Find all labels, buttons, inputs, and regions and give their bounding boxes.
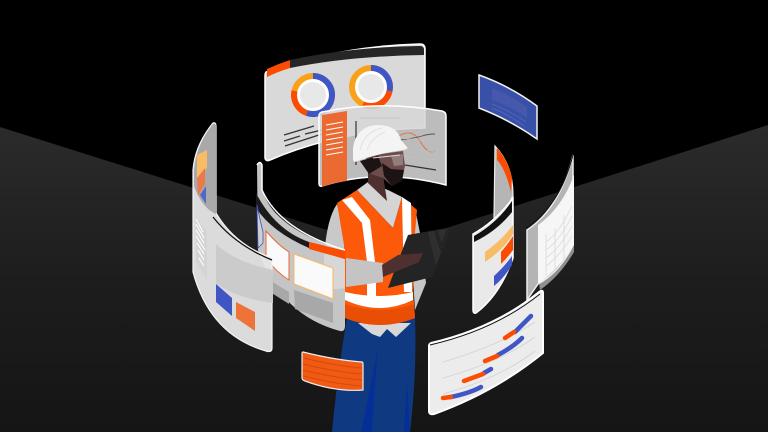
donut right: [352, 68, 390, 106]
donut left: [294, 76, 332, 114]
text lines: [284, 126, 322, 146]
blue sliver: [257, 205, 263, 248]
dark band: [256, 193, 345, 259]
panel: centre wireframe cards: [256, 162, 345, 331]
neck: [368, 171, 387, 201]
chart grid lines: [360, 118, 436, 160]
grey tile: [216, 244, 273, 303]
sidebar: [322, 111, 347, 187]
sidebar lines: [326, 122, 343, 155]
orange tile: [236, 302, 255, 331]
grey tile two: [294, 290, 333, 323]
back fold: [194, 124, 216, 214]
card lines: [492, 104, 526, 126]
table underside shadow: [538, 240, 574, 290]
white tile one: [266, 231, 289, 280]
shirt collar: [357, 182, 402, 228]
bars blue: [451, 316, 531, 397]
black band: [474, 201, 512, 242]
background floor: [0, 125, 768, 432]
orange header: [309, 242, 345, 259]
back fold: [494, 146, 513, 218]
panel: top donut dashboard: [265, 44, 425, 161]
engineer figure: [324, 125, 452, 432]
tablet sheen: [428, 229, 447, 266]
panel: orange card: [302, 352, 363, 390]
front face: [473, 198, 513, 313]
table grid: [546, 206, 572, 276]
orange bar: [501, 236, 513, 264]
face: [366, 151, 405, 186]
card lines: [303, 358, 362, 386]
vest stripes: [342, 197, 412, 298]
panel: gantt chart: [429, 291, 543, 414]
header bar: [290, 46, 424, 68]
vest band: [345, 292, 413, 308]
blue chevron: [200, 186, 206, 204]
chart series: [399, 133, 435, 152]
vest: [337, 190, 417, 325]
amber bar: [485, 225, 513, 262]
vest shade: [345, 304, 415, 325]
orange chevron: [197, 168, 205, 196]
helmet: [353, 125, 408, 162]
board outline: [193, 123, 272, 352]
panel: right table: [526, 155, 574, 300]
hair: [360, 156, 382, 174]
glasses lens: [391, 154, 403, 166]
helmet ridge: [360, 128, 385, 150]
panel: right narrow chart: [473, 146, 513, 313]
top edge shadow: [213, 217, 272, 260]
white tile two: [294, 254, 333, 299]
grey tile one: [269, 280, 289, 304]
shirt tail: [358, 323, 411, 337]
forearm: [346, 258, 383, 287]
header accent: [267, 60, 290, 77]
trouser creases: [361, 347, 410, 432]
amber chevron: [197, 150, 207, 178]
panel: blue card: [479, 75, 537, 139]
hand: [382, 253, 423, 277]
top edge shadow: [430, 294, 540, 345]
shirt sleeve: [324, 204, 350, 290]
panel: left curved board: [193, 123, 273, 352]
blue tile: [216, 284, 232, 316]
trousers: [332, 318, 415, 432]
top edge shadow: [526, 155, 573, 228]
tablet: [388, 227, 452, 288]
text lines: [196, 219, 205, 266]
chart axis: [356, 121, 436, 170]
gantt grid lines: [443, 322, 535, 394]
glasses: [373, 155, 400, 158]
back shirt arm: [410, 208, 426, 310]
text column: [196, 218, 207, 280]
beard: [382, 163, 404, 186]
panel: translucent line chart: [319, 106, 446, 187]
card highlight: [492, 88, 527, 118]
blue bar: [494, 256, 512, 286]
bars orange: [443, 332, 514, 398]
